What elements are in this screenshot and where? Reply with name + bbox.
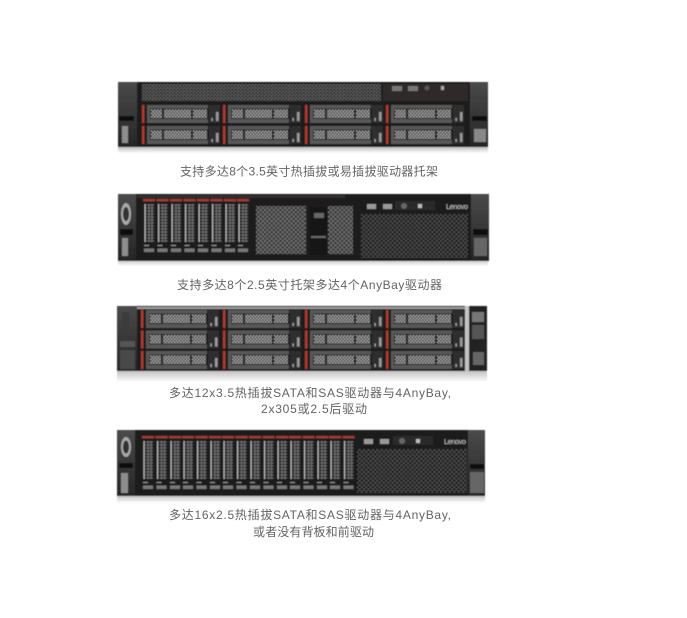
caption 4: 多达16x2.5热插拔SATA和SAS驱动器与4AnyBay,: [169, 507, 451, 522]
top label strip: [137, 195, 345, 198]
right ear: [465, 306, 487, 371]
server 2: eight 2.5 inch bays: [118, 194, 489, 266]
caption 3: 多达12x3.5热插拔SATA和SAS驱动器与4AnyBay,: [169, 385, 451, 400]
centre vents: [256, 206, 353, 255]
right ear: [471, 194, 489, 260]
2.5 inch drive slots: [143, 199, 249, 255]
caption 3: [169, 385, 451, 416]
chassis: [117, 306, 487, 371]
top grille: [142, 84, 381, 101]
server 3: twelve 3.5 inch bays: [117, 306, 487, 382]
right vent: [357, 449, 467, 493]
control panel: [383, 84, 468, 101]
2.5 inch drive slots: [142, 436, 354, 492]
right ear: [470, 82, 488, 146]
reflection: [118, 146, 488, 153]
left ear: [118, 194, 136, 260]
USB ports and panel: [367, 201, 435, 210]
drive bays: [142, 104, 464, 145]
server 4: sixteen 2.5 inch bays: [117, 430, 485, 503]
chassis: [118, 82, 488, 147]
chassis: [117, 430, 485, 496]
caption 1: 支持多达8个3.5英寸热插拔或易插拔驱动器托架: [180, 164, 438, 178]
reflection: [117, 494, 485, 503]
caption 4: 或者没有背板和前驱动: [253, 524, 374, 539]
caption 4: [169, 507, 451, 539]
left ear: [118, 82, 137, 146]
left ear: [117, 306, 137, 371]
server 1: eight 3.5 inch bays: [118, 82, 488, 153]
USB ports and panel: [364, 436, 433, 445]
left ear: [117, 430, 135, 496]
reflection: [118, 258, 488, 266]
reflection: [117, 368, 487, 382]
chassis: [118, 194, 489, 261]
drive bays: [141, 309, 464, 370]
caption 3: 2x305或2.5后驱动: [261, 402, 367, 416]
right ear: [468, 430, 485, 496]
caption 2: 支持多达8个2.5英寸托架多达4个AnyBay驱动器: [177, 277, 442, 292]
right vent: [361, 214, 468, 258]
logo: Lenovo: Lenovo: [444, 437, 466, 446]
logo: Lenovo: Lenovo: [446, 202, 468, 211]
